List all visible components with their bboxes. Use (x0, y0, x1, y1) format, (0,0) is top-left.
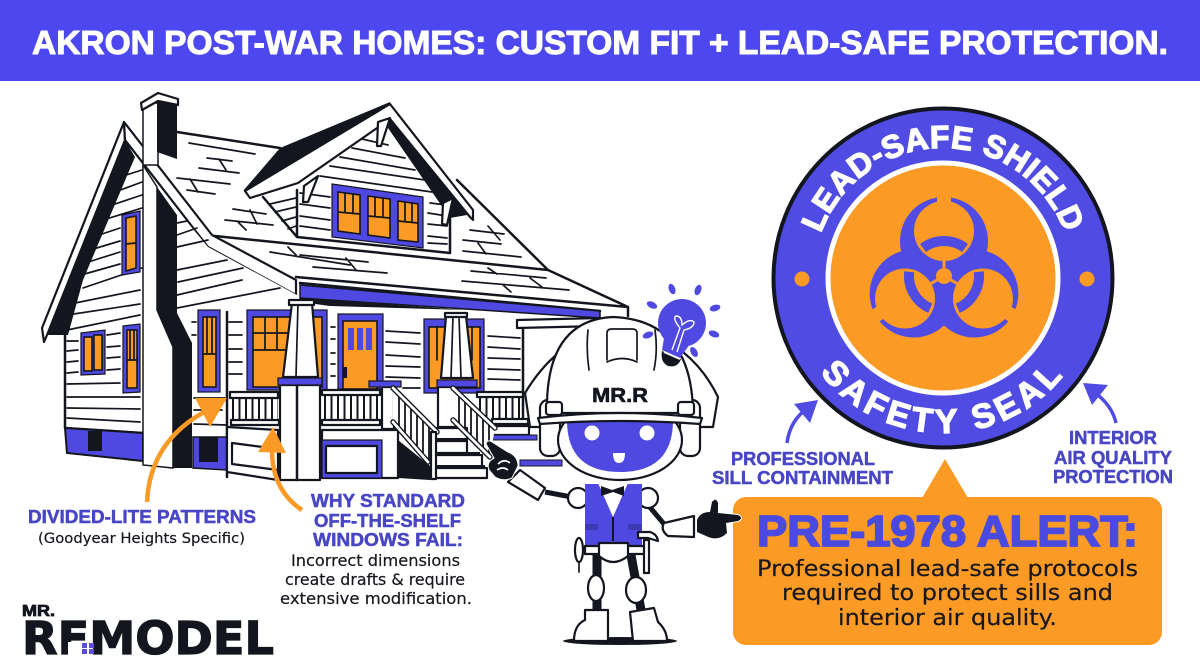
label: professional sill containment: PROFESSIONAL (731, 449, 875, 469)
label: interior air quality protection: PROTECTION (1053, 467, 1173, 487)
label: interior air quality protection: INTERIOR (1069, 428, 1157, 448)
icon: biohazard symbol (854, 195, 1034, 354)
robot shadow (563, 637, 677, 645)
porch railings and lower panels (227, 390, 562, 480)
label: why standard windows fail: create drafts & require (285, 570, 465, 589)
icon: light bulb (642, 283, 721, 366)
label: interior air quality protection: AIR QUALITY (1054, 448, 1172, 468)
title banner (0, 0, 1200, 81)
label: divided-lite patterns: DIVIDED-LITE PATTERNS (28, 507, 256, 527)
robot legs (574, 555, 667, 641)
orange arrow: divided-lite patterns (147, 398, 227, 502)
robot mascot Mr. R (486, 283, 741, 645)
title banner: AKRON POST-WAR HOMES: CUSTOM FIT + LEAD-SAFE PROTECTION. (32, 24, 1168, 61)
robot hard hat (538, 317, 702, 424)
robot hard hat: MR.R (592, 385, 649, 407)
callout: pre-1978 alert: PRE-1978 ALERT: (757, 507, 1138, 556)
right side wall (177, 210, 297, 470)
robot right arm pointing at alert (638, 488, 741, 538)
chimney (141, 93, 192, 468)
porch pillars (278, 300, 477, 480)
porch wall, windows and door (226, 285, 600, 477)
robot vest (585, 483, 642, 547)
label: professional sill containment (712, 449, 893, 488)
label: divided-lite patterns (28, 507, 256, 547)
label: interior air quality protection (1053, 428, 1173, 487)
callout: pre-1978 alert (733, 459, 1162, 645)
main roof (124, 102, 628, 316)
label: why standard windows fail (280, 491, 472, 608)
label: divided-lite patterns: (Goodyear Heights Specific) (38, 531, 245, 547)
label: professional sill containment: SILL CONTAINMENT (712, 468, 893, 488)
robot left arm pointing at house (486, 441, 588, 508)
porch stairs (393, 388, 495, 480)
label: why standard windows fail: Incorrect dimensions (291, 551, 460, 570)
lead-safe shield seal (772, 106, 1114, 450)
robot tool belt (575, 532, 658, 573)
callout: pre-1978 alert: Professional lead-safe protocols (757, 557, 1138, 582)
robot head and face (525, 345, 718, 480)
label: why standard windows fail: extensive modification. (280, 589, 472, 608)
house illustration (42, 93, 628, 480)
lead-safe shield seal: LEAD-SAFE SHIELD (800, 125, 1082, 232)
gable fascia and dark soffit (42, 122, 296, 342)
lead-safe shield seal: SAFETY SEAL (822, 360, 1064, 434)
label: why standard windows fail: OFF-THE-SHELF (314, 511, 461, 531)
label: why standard windows fail: WHY STANDARD (311, 491, 465, 511)
callout: pre-1978 alert: interior air quality. (838, 606, 1057, 631)
orange arrow: standard windows fail (258, 427, 302, 510)
side wall windows (81, 211, 220, 393)
logo: Mr. Remodel: MR. (22, 603, 55, 620)
label: why standard windows fail: WINDOWS FAIL: (313, 530, 463, 550)
logo: Mr. Remodel: REMODEL (22, 612, 274, 665)
arrow: air quality (1083, 383, 1116, 423)
left gable wall (65, 150, 143, 461)
arrow: sill containment (787, 400, 818, 443)
callout: pre-1978 alert: required to protect sills and (782, 581, 1113, 606)
dormer (243, 102, 473, 253)
